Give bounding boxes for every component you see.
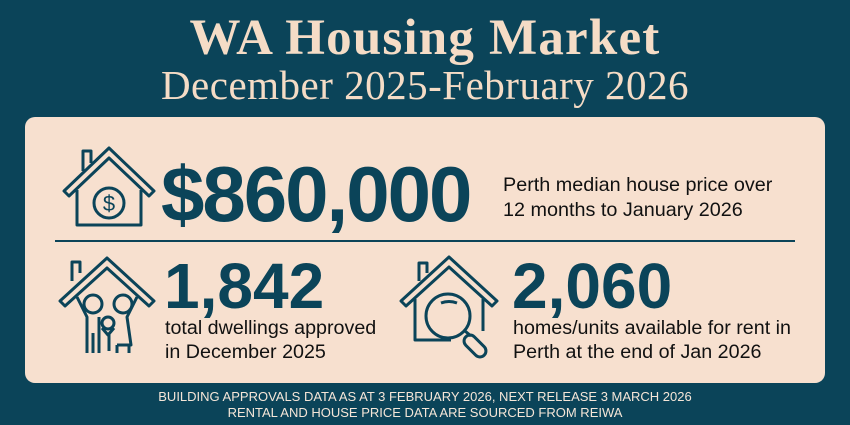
footer notes [158, 389, 692, 420]
text: dwellings description [165, 317, 376, 363]
icon: house with dollar: $ [103, 191, 115, 216]
subtitle: December 2025-February 2026 [161, 62, 689, 108]
text: median description: 12 months to January 2026 [503, 199, 743, 221]
footer notes: RENTAL AND HOUSE PRICE DATA ARE SOURCED FROM REIWA [228, 405, 622, 420]
icon: house with magnifier [399, 255, 499, 358]
text: dwellings description: total dwellings approved [165, 317, 376, 339]
text: rentals description [513, 317, 791, 363]
text: median description [503, 174, 772, 221]
icon: house with dollar [62, 146, 156, 226]
icon: family house [58, 256, 156, 353]
text: dwellings description: in December 2025 [165, 341, 326, 363]
big number: median price: $860,000 [161, 150, 470, 238]
big number: dwellings: 1,842 [164, 250, 324, 322]
footer notes: BUILDING APPROVALS DATA AS AT 3 FEBRUARY 2026, NEXT RELEASE 3 MARCH 2026 [158, 389, 692, 404]
title: WA Housing Market [190, 10, 660, 66]
text: rentals description: Perth at the end of Jan 2026 [513, 341, 761, 363]
big number: rentals: 2,060 [512, 250, 672, 322]
text: median description: Perth median house price over [503, 174, 772, 196]
panel: stats [25, 117, 825, 383]
text: rentals description: homes/units available for rent in [513, 317, 791, 339]
